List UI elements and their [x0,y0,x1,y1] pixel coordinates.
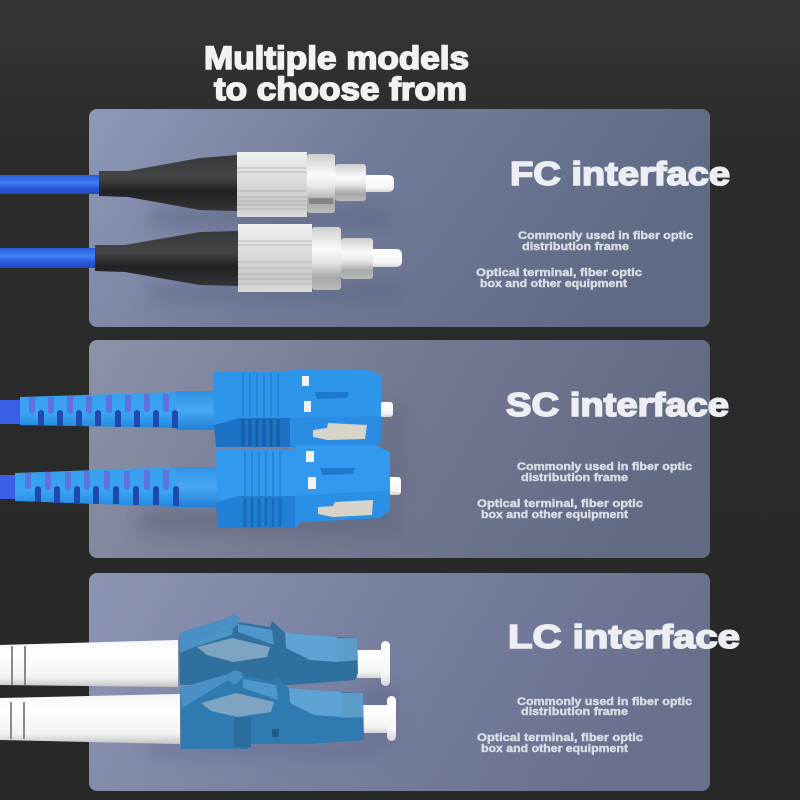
LC description: distribution frame [521,706,628,718]
connector shadows: FC [150,208,400,300]
SC interface title: SC interface [506,386,729,423]
panel: FC interface [89,109,730,327]
heading: Multiple models to choose from: Multiple models [204,40,469,76]
icon: SC connector, lower [0,445,401,528]
LC description: Commonly used in fiber optic [517,696,692,708]
icon: LC connector, lower [0,670,396,749]
LC description [477,696,692,755]
FC description: Optical terminal, fiber optic [476,267,642,279]
FC description [476,230,693,290]
connector shadows: SC [140,405,403,534]
icon: FC connector, lower [0,224,402,292]
LC description: Optical terminal, fiber optic [477,732,643,744]
SC description [477,461,692,521]
heading: Multiple models to choose from: to choose from [214,71,467,107]
heading: Multiple models to choose from [204,40,469,107]
FC description: box and other equipment [480,278,627,290]
icon: LC connector, upper [0,615,390,687]
SC description: Commonly used in fiber optic [517,461,692,473]
LC description: box and other equipment [481,743,628,755]
SC description: Optical terminal, fiber optic [477,498,643,510]
icon: FC connector, upper [0,152,394,217]
connector shadows: LC [150,685,395,756]
panel: LC interface [89,573,740,791]
LC interface title: LC interface [508,618,740,655]
SC description: box and other equipment [481,509,628,521]
FC description: Commonly used in fiber optic [518,230,693,242]
icon: SC connector, upper [0,370,393,447]
panel: SC interface [89,340,729,558]
FC interface title: FC interface [510,155,730,192]
SC description: distribution frame [521,472,628,484]
FC description: distribution frame [522,241,629,253]
